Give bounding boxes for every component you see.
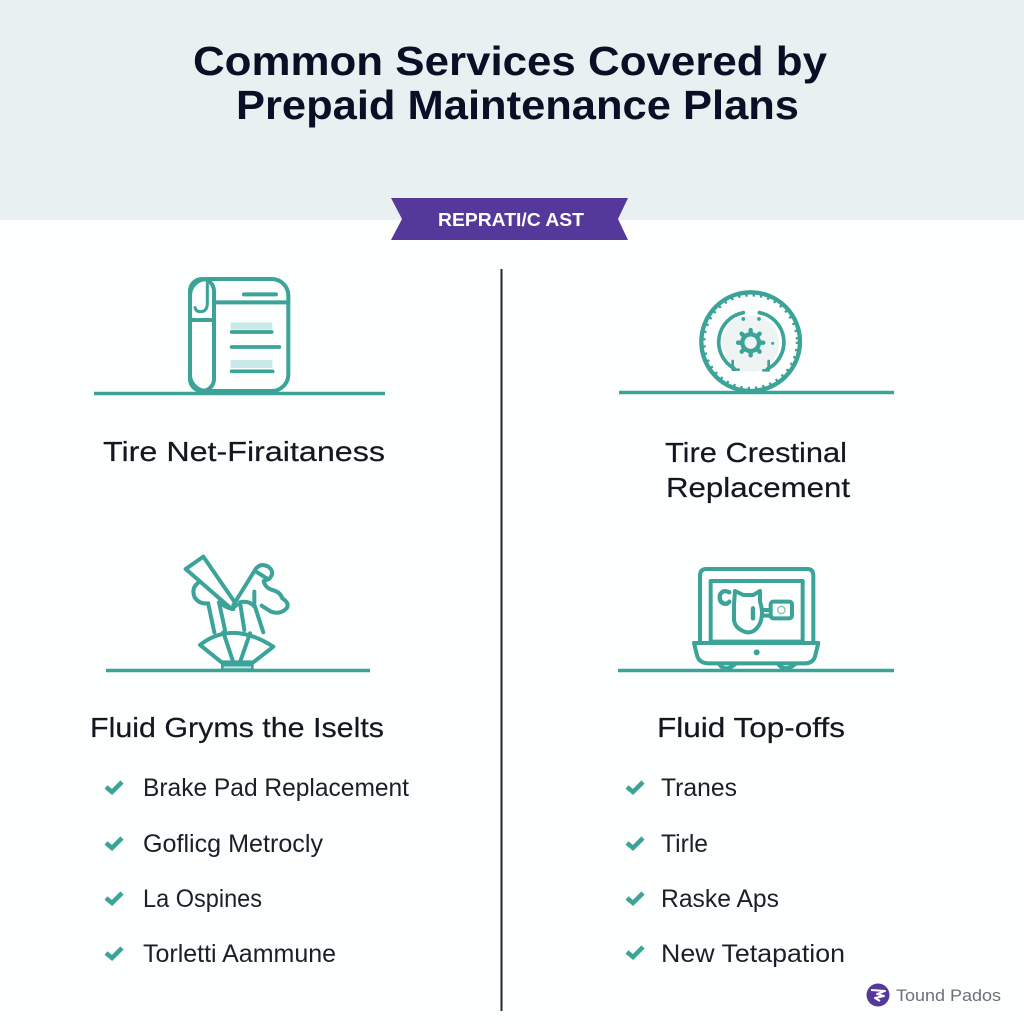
heading: Fluid Top-offs — [657, 712, 845, 743]
ribbon banner: REPRATI/C AST — [438, 210, 584, 230]
panel: top right service — [619, 292, 894, 503]
panel: bottom left service — [90, 557, 384, 743]
title: Common Services Covered by — [193, 38, 827, 84]
checklist: right column: New Tetapation — [661, 940, 845, 968]
panel: top left service — [94, 279, 385, 467]
footer logo: Tound Pados — [896, 986, 1001, 1005]
icon: tire with gear — [701, 292, 800, 391]
checklist: left column: Torletti Aammune — [143, 940, 336, 968]
icon: laptop diagnostics — [694, 569, 818, 668]
checklist: right column: Tirle — [661, 830, 708, 858]
ground line — [619, 391, 894, 394]
heading: Tire Crestinal — [665, 437, 847, 468]
ground line — [94, 392, 385, 395]
title: Prepaid Maintenance Plans — [236, 82, 799, 128]
checklist: left column — [106, 774, 409, 968]
ribbon banner — [391, 198, 628, 240]
header band — [0, 0, 1024, 220]
panel: bottom right service — [618, 569, 894, 743]
checklist: left column: Brake Pad Replacement — [143, 774, 409, 802]
icon: document binder — [190, 279, 288, 391]
ground line — [618, 669, 894, 672]
center divider — [500, 269, 502, 1011]
checklist: right column: Tranes — [661, 774, 737, 802]
heading: Replacement — [666, 472, 850, 503]
checklist: right column — [627, 774, 845, 968]
icon: fluid bouquet — [186, 557, 288, 670]
title — [193, 38, 827, 128]
checklist: left column: La Ospines — [143, 885, 262, 913]
heading — [665, 437, 850, 503]
ground line — [106, 669, 370, 672]
footer logo — [866, 984, 1001, 1006]
heading: Fluid Gryms the Iselts — [90, 712, 384, 743]
checklist: left column: Goflicg Metrocly — [143, 830, 323, 858]
checklist: right column: Raske Aps — [661, 885, 779, 913]
heading: Tire Net-Firaitaness — [103, 436, 385, 467]
